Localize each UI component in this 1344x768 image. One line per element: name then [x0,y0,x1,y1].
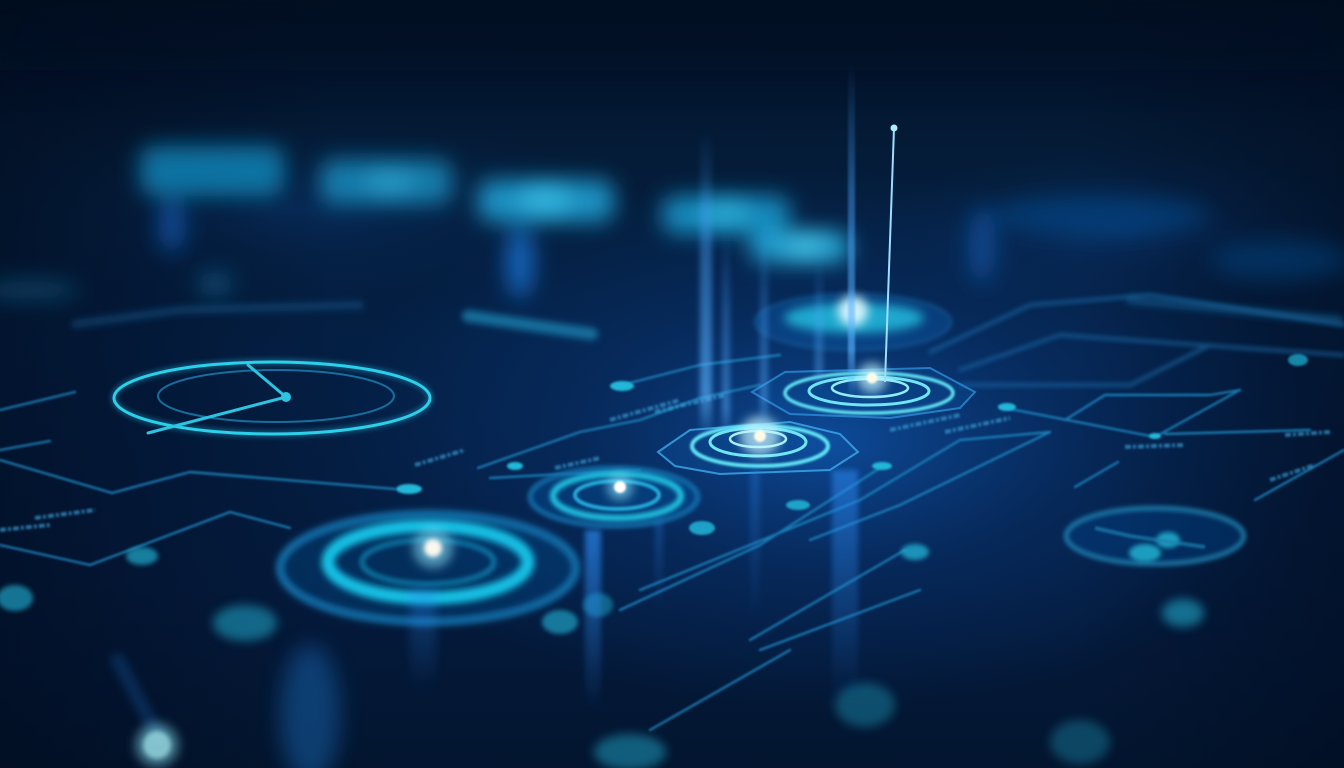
target node 5 blurred [755,294,951,350]
gauge dial [114,362,430,434]
target node 4 [752,363,975,418]
target node 2 [530,468,698,526]
small connection nodes [0,354,1308,768]
tiny circuit labels [0,395,1330,530]
target node 3 [658,416,858,474]
blurred distant nodes [0,146,1344,334]
circuit traces [0,295,1344,730]
bright antenna line [885,124,898,382]
light beams [410,60,858,710]
lower left bokeh [115,645,340,768]
top vignette [0,0,1344,70]
right target [1066,508,1244,564]
large foreground target [280,514,576,622]
